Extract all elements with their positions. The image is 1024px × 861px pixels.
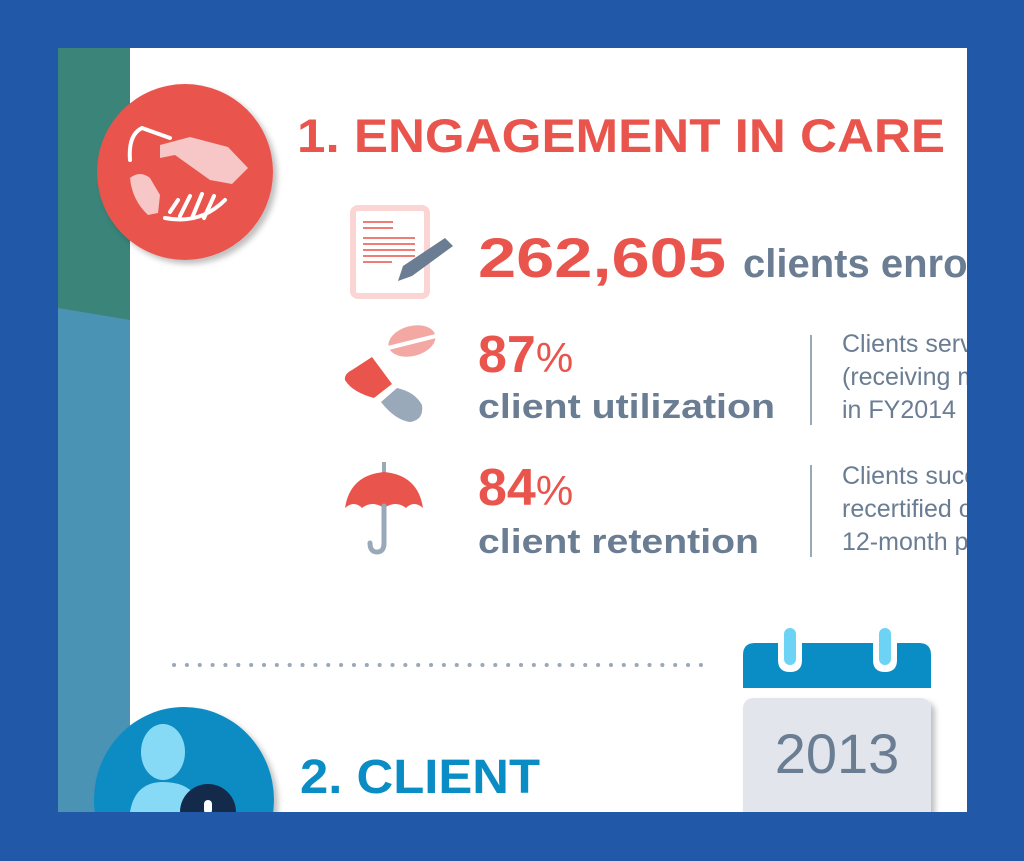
icon: calendar 2013: 2013 xyxy=(775,722,899,785)
icon: calendar 2013 xyxy=(743,628,931,828)
left side strip xyxy=(58,48,130,812)
stat: 84% client retention: client retention xyxy=(478,523,759,561)
text: retention description: 12-month period xyxy=(842,528,1024,556)
stat: clients enrolled xyxy=(480,238,966,286)
heading: 2. CLIENT: 2. CLIENT xyxy=(300,751,540,804)
stat: 84% client retention xyxy=(480,468,756,554)
panel: main white card xyxy=(58,48,967,812)
text: utilization description xyxy=(843,334,967,418)
stat: 87% client utilization: client utilization xyxy=(478,388,775,426)
stat: 87% client utilization xyxy=(480,336,773,418)
title: 1. ENGAGEMENT IN CARE: 1. ENGAGEMENT IN CARE xyxy=(297,109,945,162)
icon: client circle xyxy=(94,707,281,812)
text: retention description: recertified over a xyxy=(842,495,1024,523)
text: utilization description: in FY2014 xyxy=(842,396,956,424)
stat: 87% client utilization: 87% xyxy=(478,326,573,384)
text: utilization description: Clients served xyxy=(842,330,1000,358)
text: retention description xyxy=(843,466,967,555)
icon: pills xyxy=(345,320,439,422)
icon: umbrella xyxy=(345,462,423,552)
stat: clients enrolled: 262,605 xyxy=(478,226,726,289)
icon: document with pen xyxy=(353,208,453,296)
stat: 84% client retention: 84% xyxy=(478,459,573,517)
icon: handshake circle xyxy=(97,84,273,260)
